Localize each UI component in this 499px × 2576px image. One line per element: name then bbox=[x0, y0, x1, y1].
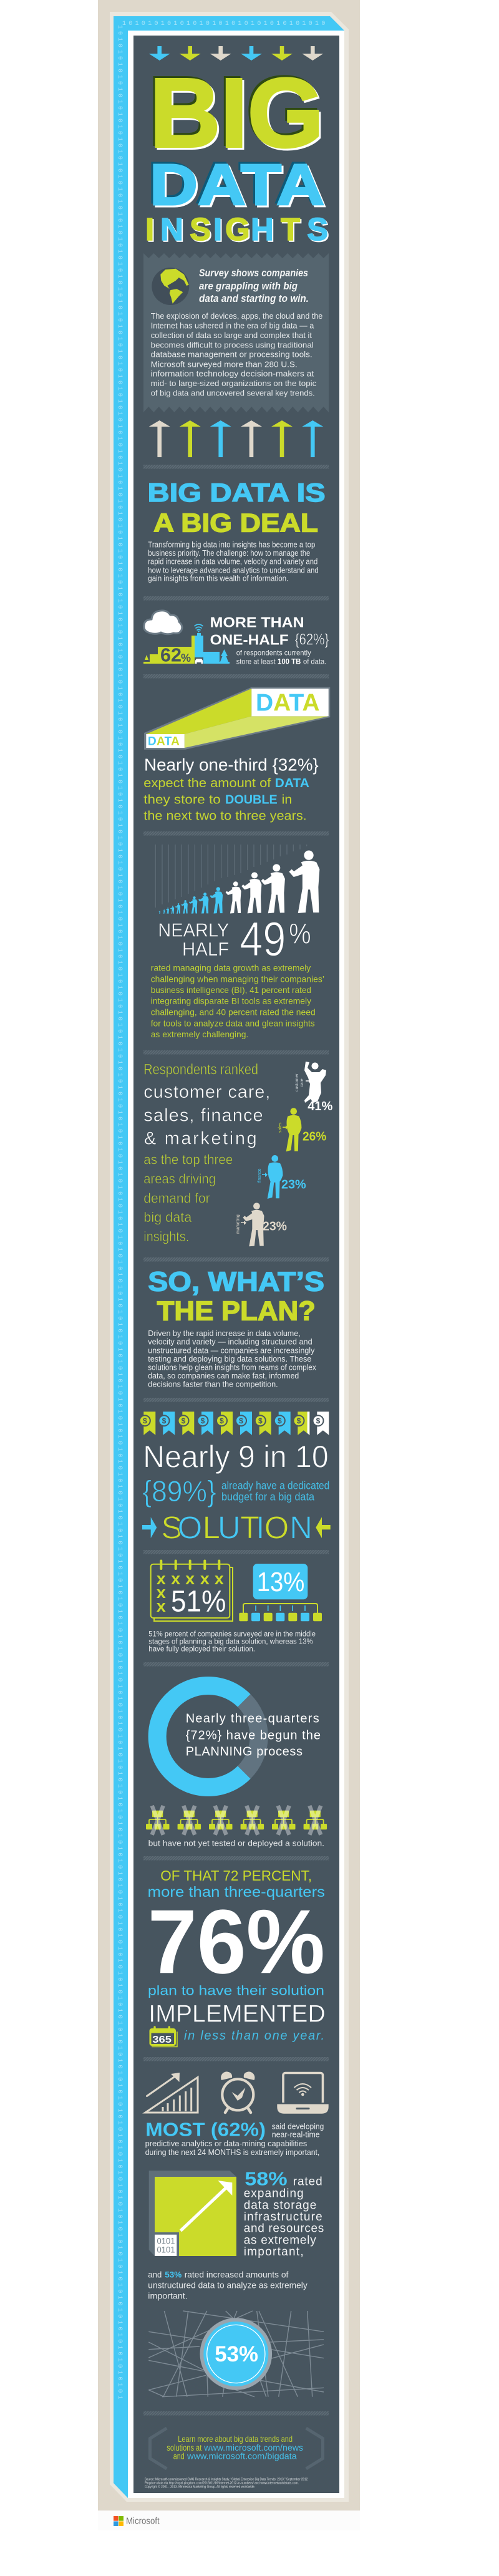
stat: more than one-half: MORE THAN bbox=[210, 614, 304, 631]
text: 53% rated bbox=[148, 2270, 308, 2300]
text: 58% rated: rated bbox=[293, 2175, 322, 2188]
intro body text: mid- to large-sized organizations on the topic bbox=[151, 379, 317, 388]
blue binary spine: 101010101010101010101010101010101010101010101010101010101010101010101010101010101010101010101010101010101010101010101010101010101010101010101010101010101010101010101010101010101010101010101010101010101010101010101010101010101010101010101010101010101010101010101010101010101010101010101010101010101010101010101010101010101010101010101010101010101010101010101010101010101010101010101 bbox=[116, 25, 123, 2401]
stat: nearly half 49%: HALF bbox=[182, 938, 229, 960]
icon: calendar 365 bbox=[150, 2027, 177, 2047]
intro body text: becomes difficult to process using traditional bbox=[151, 340, 314, 349]
storage box with arrow: 0101 bbox=[157, 2245, 175, 2255]
body: business priority: how to leverage advanced analytics to understand and bbox=[148, 566, 319, 574]
title: DATA: DATA bbox=[148, 150, 322, 215]
text: nearly three-quarters: Nearly three-quarters bbox=[186, 1712, 319, 1726]
body: driven by: testing and deploying big data solutions. These bbox=[148, 1355, 311, 1363]
text: 53% rated: and bbox=[148, 2270, 162, 2280]
down arrows row bbox=[149, 46, 323, 61]
intro body text: information technology decision-makers at bbox=[151, 369, 314, 379]
body: driven by: solutions help glean insights from reams of complex bbox=[148, 1363, 316, 1372]
donut chart: 72% bbox=[157, 1685, 259, 1787]
intro body text: Microsoft surveyed more than 280 U.S. bbox=[151, 359, 298, 369]
ribbons: 9 in 10: $ bbox=[316, 1416, 321, 1425]
crossed org chart icons bbox=[146, 1806, 327, 1835]
source notes: Copyright © 2001 - 2013. Minnesota Marketing Group. All rights reserved worldwide. bbox=[145, 2485, 255, 2489]
stat: most 62%: predictive analytics or data-mining capabilities bbox=[145, 2139, 307, 2148]
text: nearly three-quarters: PLANNING process bbox=[186, 1745, 303, 1758]
stat: 76%: 76% bbox=[148, 1891, 325, 1992]
icon: laptop bbox=[277, 2073, 329, 2114]
text: 58% rated: expanding bbox=[244, 2187, 304, 2201]
title: BIG: BIG bbox=[150, 59, 324, 168]
ribbons: 9 in 10: $ bbox=[182, 1416, 186, 1425]
stat: nearly 9 in 10: budget for a big data bbox=[221, 1491, 314, 1503]
storage box with arrow bbox=[149, 2171, 236, 2256]
skyline with 62%: % bbox=[181, 652, 191, 664]
stat: nearly 9 in 10 bbox=[142, 1440, 329, 1508]
figure: customer care 41%: care bbox=[300, 1078, 304, 1087]
body: driven by: Driven by the rapid increase in data volume, bbox=[148, 1329, 301, 1338]
title: BIG: BIG bbox=[148, 57, 322, 166]
body: business priority: rapid increase in data volume, velocity and variety and bbox=[148, 558, 317, 566]
ribbons: 9 in 10: $ bbox=[258, 1416, 263, 1425]
text: respondents ranked: & marketing bbox=[144, 1128, 257, 1148]
microsoft logo bbox=[114, 2516, 160, 2527]
ribbons: 9 in 10: $ bbox=[220, 1416, 224, 1425]
stat: nearly one-third: the next two to three years. bbox=[143, 810, 307, 823]
source notes: Source: Microsoft-commissioned CMG Research & Insights Study, “Global Enterprise Big Data Trends: 2013,” September 2012 bbox=[145, 2478, 308, 2482]
text: respondents ranked: insights. bbox=[143, 1229, 189, 1244]
intro body text: The explosion of devices, apps, the cloud and the bbox=[151, 311, 322, 321]
figure: finance 23% bbox=[258, 1155, 306, 1199]
heading: of that 72 percent bbox=[148, 1867, 325, 1900]
blue binary spine: 10101010101010101010101010101010 bbox=[122, 21, 328, 27]
intro body text: of big data and uncovered several key trends. bbox=[151, 388, 315, 397]
calendar: 51%: x bbox=[215, 1569, 224, 1588]
calendar: 51%: x bbox=[171, 1569, 180, 1588]
stat: more than one-half bbox=[210, 614, 329, 666]
stat: nearly one-third: expect the amount of bbox=[143, 777, 271, 790]
stat: nearly 9 in 10: {89%} bbox=[142, 1474, 216, 1508]
stat: nearly half 49% bbox=[158, 911, 311, 966]
body: business priority: gain insights from this wealth of information. bbox=[148, 574, 288, 583]
text: 53% rated: 53% bbox=[165, 2270, 182, 2280]
stat: most 62%: said developing bbox=[272, 2121, 324, 2131]
title: DATA: DATA bbox=[150, 152, 324, 217]
text: not yet tested: but have not yet tested or deployed a solution. bbox=[148, 1839, 324, 1847]
call to action: www.microsoft.com/bigdata bbox=[187, 2452, 297, 2461]
heading: so, what's the plan? bbox=[148, 1266, 324, 1327]
body: driven by: data, so companies can make fast, informed bbox=[148, 1372, 299, 1380]
figure: customer care 41% bbox=[295, 1062, 333, 1113]
blue binary spine bbox=[114, 16, 344, 2498]
body: 51 percent: 51% percent of companies surveyed are in the middle bbox=[148, 1630, 316, 1638]
stat: nearly one-third: in bbox=[282, 793, 292, 806]
call to action: Learn more about big data trends and bbox=[178, 2434, 293, 2444]
body: driven by: velocity and variety — including structured and bbox=[148, 1338, 312, 1347]
stat: more than one-half: of respondents currently bbox=[236, 649, 311, 657]
deployment 13% chart: 13% bbox=[257, 1567, 304, 1597]
up arrows row bbox=[149, 420, 323, 457]
figure: sales 26%: 26% bbox=[303, 1130, 327, 1143]
heading: so, what's the plan?: SO, WHAT’S bbox=[148, 1266, 324, 1297]
stat: nearly 9 in 10: Nearly 9 in 10 bbox=[143, 1440, 329, 1474]
text: respondents ranked: sales, finance bbox=[143, 1105, 263, 1125]
calendar: 51%: x bbox=[200, 1569, 210, 1588]
body: business priority: Transforming big data into insights has become a top bbox=[148, 540, 315, 549]
stat: most 62%: near-real-time bbox=[272, 2130, 320, 2139]
stat: nearly one-third: DOUBLE bbox=[225, 793, 278, 806]
intro heading: data and starting to win. bbox=[199, 293, 309, 304]
calendar: 51%: x bbox=[185, 1569, 195, 1588]
text: 58% rated: important, bbox=[244, 2245, 304, 2259]
icon: cloud bbox=[144, 611, 182, 634]
figure: sales 26%: sales bbox=[278, 1122, 283, 1133]
ribbons: 9 in 10: $ bbox=[278, 1416, 282, 1425]
stat: most 62%: during the next 24 MONTHS is extremely important, bbox=[145, 2148, 319, 2157]
stat: more than one-half: ONE-HALF bbox=[210, 631, 289, 647]
body: business priority bbox=[148, 540, 319, 583]
title: INSIGHTS: INSIGHTS bbox=[147, 213, 329, 248]
text: nearly three-quarters bbox=[186, 1712, 321, 1758]
title: DATA: DATA bbox=[152, 154, 326, 219]
call to action: solutions at bbox=[167, 2443, 201, 2453]
microsoft logo: Microsoft bbox=[126, 2516, 160, 2527]
figure: marketing 23%: marketing bbox=[236, 1214, 241, 1234]
source notes bbox=[145, 2478, 308, 2489]
stat: more than one-half: of data. bbox=[303, 657, 326, 666]
figure: customer care 41%: 41% bbox=[308, 1100, 333, 1113]
figure: sales 26% bbox=[278, 1108, 327, 1151]
title: INSIGHTS: INSIGHTS bbox=[145, 211, 328, 247]
stat: nearly one-third bbox=[143, 755, 319, 823]
text: 58% rated bbox=[244, 2167, 324, 2259]
body: managing data growth: challenging when managing their companies’ bbox=[151, 974, 324, 984]
stat: most 62% bbox=[145, 2118, 324, 2157]
figure: customer care 41%: customer bbox=[295, 1073, 299, 1092]
text: 58% rated: 58% bbox=[245, 2167, 288, 2189]
heading: big data is a big deal bbox=[148, 478, 326, 537]
stat: more than one-half: store at least bbox=[236, 657, 276, 666]
circle: 53% bbox=[200, 2318, 272, 2390]
heading: so, what's the plan?: THE PLAN? bbox=[157, 1296, 316, 1327]
stat: more than one-half: {62%} bbox=[295, 631, 329, 648]
calendar: 51%: x bbox=[157, 1569, 166, 1588]
text: 58% rated: as extremely bbox=[244, 2234, 316, 2247]
stat: nearly half 49%: % bbox=[289, 918, 311, 950]
data perspective graphic: DATA bbox=[148, 735, 180, 748]
text: 58% rated: data storage bbox=[244, 2199, 316, 2212]
text: plan implemented bbox=[148, 1983, 326, 2043]
ribbons: 9 in 10 bbox=[140, 1411, 329, 1435]
icon: globe bbox=[152, 268, 189, 305]
stat: nearly one-third: Nearly one-third {32%} bbox=[144, 755, 319, 775]
ribbons: 9 in 10: $ bbox=[143, 1416, 147, 1425]
heading: of that 72 percent: OF THAT 72 PERCENT, bbox=[160, 1867, 312, 1884]
body: 51 percent: stages of planning a big data solution, whereas 13% bbox=[148, 1639, 313, 1646]
text: plan implemented: IMPLEMENTED bbox=[148, 2001, 326, 2028]
text: plan implemented: plan to have their solution bbox=[148, 1983, 324, 1998]
ribbons: 9 in 10: $ bbox=[162, 1416, 167, 1425]
text: respondents ranked: Respondents ranked bbox=[143, 1061, 258, 1078]
storage box with arrow: 0101 bbox=[157, 2235, 175, 2245]
calendar: 51%: x bbox=[157, 1583, 166, 1602]
title: BIG: BIG bbox=[152, 61, 326, 170]
text: 58% rated: infrastructure bbox=[244, 2210, 322, 2224]
data perspective graphic bbox=[144, 687, 330, 750]
text: respondents ranked: areas driving bbox=[143, 1171, 216, 1186]
text: 58% rated: and resources bbox=[244, 2222, 324, 2235]
icon: alarm clock bbox=[221, 2071, 254, 2113]
intro body text: database management or processing tools. bbox=[151, 350, 312, 359]
ribbons: 9 in 10: $ bbox=[201, 1416, 205, 1425]
stat: nearly one-third: DATA bbox=[275, 777, 309, 790]
circle: 53%: 53% bbox=[215, 2342, 258, 2366]
tangled web of lines bbox=[148, 2311, 324, 2397]
body: business priority: business priority. The challenge: how to manage the bbox=[148, 549, 310, 558]
body: managing data growth: for tools to analyze data and glean insights bbox=[151, 1018, 315, 1028]
ribbons: 9 in 10: $ bbox=[239, 1416, 243, 1425]
body: driven by: unstructured data — companies are increasingly bbox=[148, 1346, 315, 1355]
body: managing data growth bbox=[151, 963, 324, 1039]
heading: big data is a big deal: A BIG DEAL bbox=[153, 508, 318, 537]
ribbons: 9 in 10: $ bbox=[297, 1416, 301, 1425]
growing people silhouettes bbox=[159, 851, 319, 914]
figure: marketing 23% bbox=[236, 1203, 287, 1246]
call to action: www.microsoft.com/news bbox=[203, 2443, 303, 2453]
icon: rising chart bbox=[145, 2073, 198, 2113]
body: managing data growth: as extremely challenging. bbox=[151, 1029, 248, 1039]
text: plan implemented: in less than one year. bbox=[184, 2029, 324, 2043]
word: solution with arrows: SOLUTION bbox=[161, 1510, 312, 1546]
call to action bbox=[150, 2428, 323, 2469]
calendar: 51%: 51% bbox=[171, 1585, 226, 1618]
text: respondents ranked: as the top three bbox=[143, 1152, 233, 1168]
call to action: and bbox=[173, 2452, 185, 2461]
calendar: 51% bbox=[151, 1561, 233, 1621]
intro heading: are grappling with big bbox=[199, 280, 298, 292]
body: driven by: decisions faster than the competition. bbox=[148, 1380, 278, 1388]
stat: nearly 9 in 10: already have a dedicated bbox=[221, 1479, 329, 1491]
text: respondents ranked: demand for bbox=[143, 1190, 210, 1206]
intro heading bbox=[199, 267, 309, 304]
footer faint strip bbox=[98, 2511, 360, 2530]
dark main panel bbox=[133, 36, 339, 2493]
skyline with 62% bbox=[143, 624, 230, 666]
heading: of that 72 percent: more than three-quarters bbox=[148, 1884, 325, 1900]
text: nearly three-quarters: {72%} have begun the bbox=[186, 1728, 321, 1742]
source notes: Pingdom data via http://royal.pingdom.com/2013/01/16/internet-2012-in-numbers/ and www.internetworldstats.com. bbox=[145, 2482, 299, 2486]
figure: marketing 23%: 23% bbox=[263, 1219, 287, 1233]
figure: finance 23%: finance bbox=[258, 1168, 262, 1183]
skyline with 62%: 62 bbox=[160, 644, 182, 666]
figure: finance 23%: 23% bbox=[281, 1178, 306, 1192]
intro heading: Survey shows companies bbox=[199, 267, 308, 279]
intro body text: collection of data so large and complex that it bbox=[151, 331, 312, 340]
body: managing data growth: challenging, and 40 percent rated the need bbox=[151, 1007, 316, 1017]
stat: nearly one-third: they store to bbox=[143, 793, 221, 806]
heading: big data is a big deal: BIG DATA IS bbox=[148, 478, 326, 507]
body: managing data growth: integrating disparate BI tools as extremely bbox=[151, 996, 311, 1006]
stat: most 62%: MOST (62%) bbox=[145, 2118, 266, 2140]
text: respondents ranked: customer care, bbox=[143, 1082, 270, 1102]
stat: more than one-half: 100 TB bbox=[278, 657, 301, 666]
text: 53% rated: unstructured data to analyze as extremely bbox=[148, 2280, 308, 2290]
intro body text bbox=[151, 311, 322, 397]
deployment 13% chart bbox=[239, 1564, 322, 1621]
white panel bbox=[128, 31, 344, 2498]
outer beige background panel bbox=[98, 0, 360, 2511]
body: 51 percent bbox=[148, 1630, 316, 1654]
stat: nearly half 49%: NEARLY bbox=[158, 919, 229, 941]
stat: nearly half 49%: 49 bbox=[240, 911, 286, 966]
intro body text: Internet has ushered in the era of big data — a bbox=[151, 321, 314, 331]
data perspective graphic: DATA bbox=[256, 689, 320, 716]
calendar: 51%: x bbox=[157, 1597, 166, 1615]
icon: calendar 365: 365 bbox=[152, 2035, 172, 2045]
panel: intro bbox=[143, 253, 329, 412]
growth bars bbox=[155, 845, 307, 908]
body: managing data growth: rated managing data growth as extremely bbox=[151, 963, 311, 973]
text: 53% rated: rated increased amounts of bbox=[185, 2270, 288, 2280]
body: 51 percent: have fully deployed their solution. bbox=[148, 1646, 255, 1654]
light frame bbox=[110, 12, 349, 2502]
body: managing data growth: business intelligence (BI), 41 percent rated bbox=[151, 985, 311, 995]
text: respondents ranked: big data bbox=[143, 1209, 192, 1225]
text: respondents ranked bbox=[143, 1061, 270, 1244]
text: 53% rated: important. bbox=[148, 2290, 188, 2300]
body: driven by bbox=[148, 1329, 316, 1388]
